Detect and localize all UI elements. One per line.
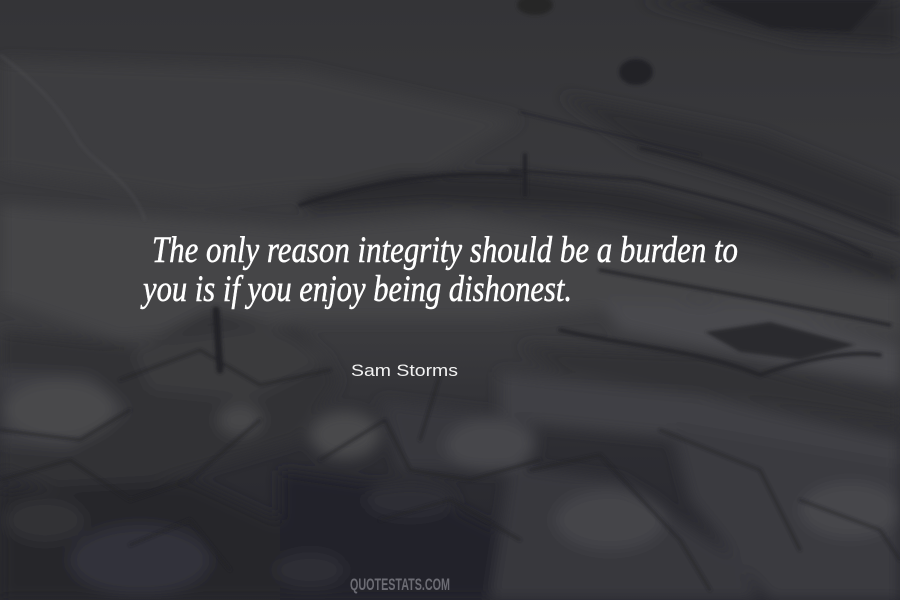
- quote line 2: you is if you enjoy being dishonest.: [140, 269, 572, 310]
- watermark: QUOTESTATS.COM: QUOTESTATS.COM: [350, 575, 450, 594]
- quote text: [140, 230, 738, 310]
- quote line 1: The only reason integrity should be a burden to: [152, 230, 738, 271]
- author name: Sam Storms: [351, 361, 458, 380]
